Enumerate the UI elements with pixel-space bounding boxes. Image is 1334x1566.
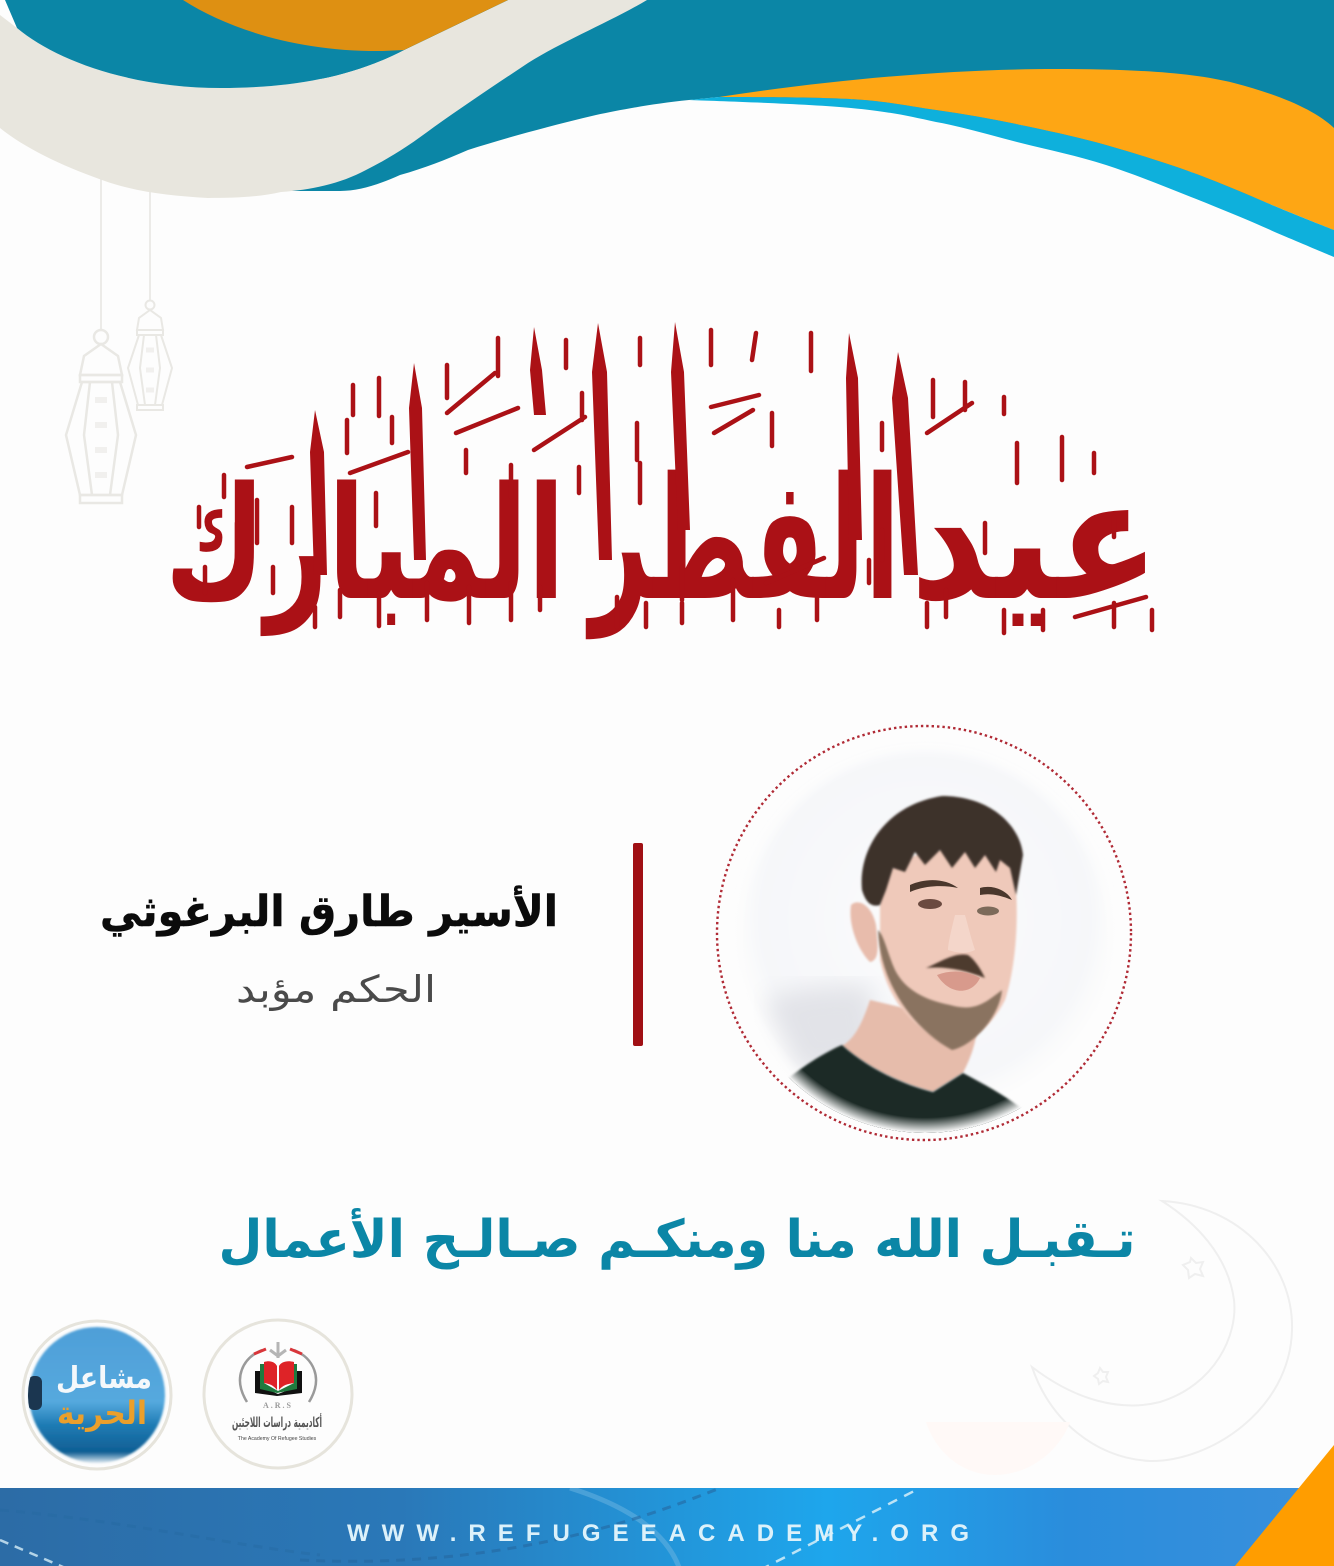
orange corner [1235,1445,1334,1566]
ornamental strokes [199,330,1152,633]
nose light [948,915,975,953]
neck [842,1000,978,1092]
left brow [910,880,958,892]
shirt [788,1044,1022,1133]
emblem arcs [240,1350,316,1402]
edge fade [788,1069,1022,1133]
cyan wave stripe [689,97,1334,257]
beige wave [0,0,647,198]
lantern: small [128,300,172,410]
dotted circle [717,726,1131,1140]
moustache [926,954,985,978]
lips [937,972,980,991]
website url: WWW.REFUGEEACADEMY.ORG [347,1520,969,1547]
faint blush shape [926,1422,1070,1475]
logo: freedom torches: الحرية [57,1394,147,1432]
title: Eid al-Fitr calligraphy: عيد [910,441,1160,638]
greeting: تـقبـل الله منا ومنكـم صـالـح الأعمال [218,1207,1136,1270]
logo lettering: مشاعل [56,1361,152,1396]
right brow [980,887,1012,900]
academy name english: The Academy Of Refugee Studies [238,1436,317,1442]
title: Eid al-Fitr calligraphy: الفطر [585,441,900,639]
ascender flourishes [310,322,918,575]
teal crescent [5,0,508,88]
beard [878,930,1002,1050]
face [880,848,1017,1043]
academy name arabic: أكاديمية دراسات اللاجئين [232,1413,322,1431]
prisoner name: الأسير طارق البرغوثي [100,885,558,937]
ARS: A.R.S [263,1401,293,1410]
photo: portrait of the prisoner [717,726,1131,1170]
orange wave [719,69,1334,230]
red pages [264,1361,277,1390]
lantern strings [101,150,150,330]
left eye [918,899,942,909]
logo: freedom torches [23,1321,171,1469]
sentence: الحكم مؤبد [236,968,436,1011]
emblem figure [270,1342,286,1358]
logo: academy of refugee studies [204,1320,352,1468]
ear [850,902,878,962]
book base [255,1371,302,1396]
right eye [977,906,999,916]
hair [862,796,1023,906]
crescent moon [1032,1201,1292,1461]
divider bar [633,843,643,1046]
dark orange crescent [183,0,508,51]
footer bar [0,1488,1334,1566]
soft wall shadow [765,985,880,1075]
flag arcs [254,1349,302,1354]
teal wave [250,0,1334,230]
title: Eid al-Fitr calligraphy: المبارك [165,453,565,636]
lantern: large [66,330,136,503]
title: Eid al-Fitr calligraphy [165,322,1160,639]
